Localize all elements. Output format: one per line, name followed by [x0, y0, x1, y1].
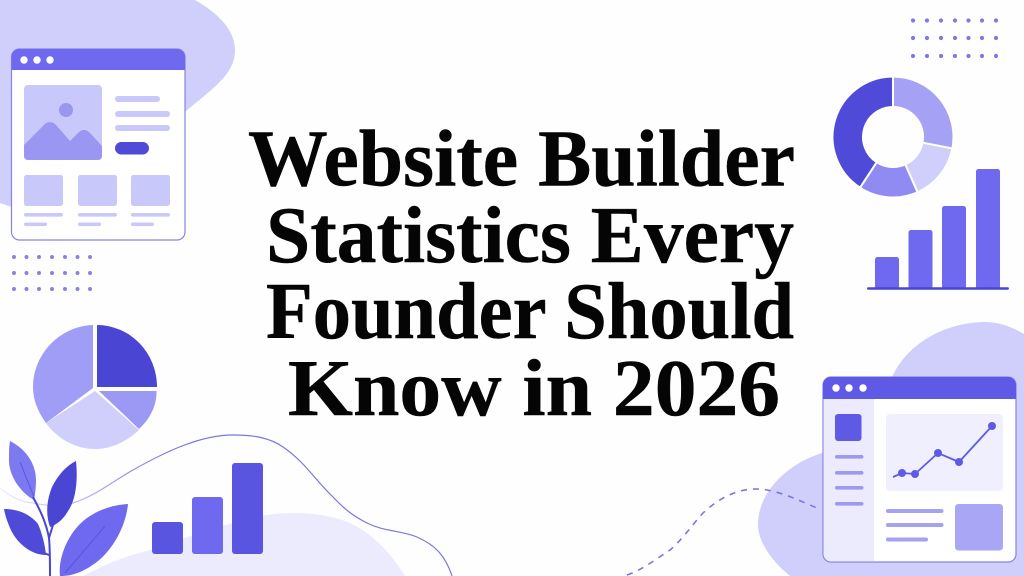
- panel: analytics dashboard window: [823, 377, 1016, 562]
- title: Statistics Every: [266, 190, 794, 280]
- chart baseline: [867, 287, 1009, 290]
- content thumbnail: [955, 504, 1003, 550]
- window control dots: [20, 56, 54, 64]
- donut chart: [833, 76, 954, 198]
- panel: website wireframe window: [12, 49, 185, 240]
- title: Website Builder: [248, 114, 795, 204]
- blob: top-left background: [0, 0, 235, 215]
- bar chart: right: [867, 169, 1009, 290]
- line chart: [886, 414, 1003, 491]
- icon: plant with leaves: [4, 441, 128, 576]
- wavy line: [0, 435, 452, 576]
- blob: bottom-centre background: [83, 513, 405, 576]
- window control dots: [832, 384, 867, 392]
- image placeholder: [24, 85, 102, 160]
- title: Know in 2026: [288, 343, 780, 433]
- sidebar menu lines: [835, 455, 864, 506]
- title: Founder Should: [266, 266, 794, 356]
- sidebar: [824, 399, 874, 561]
- dashed connector: [627, 489, 817, 575]
- product cards: [24, 175, 170, 226]
- window header bar: [823, 377, 1016, 399]
- pie chart: [33, 325, 157, 449]
- bar chart: bottom-left: [152, 463, 263, 554]
- text lines: [115, 96, 170, 131]
- dot grid: left: [12, 255, 92, 291]
- title: [248, 114, 795, 433]
- blob: bottom-right background: [758, 322, 1024, 576]
- sidebar icon: [835, 414, 862, 441]
- content lines: [886, 509, 944, 542]
- window header bar: [12, 49, 185, 70]
- button: [115, 142, 149, 154]
- dot grid: top-right: [911, 18, 998, 58]
